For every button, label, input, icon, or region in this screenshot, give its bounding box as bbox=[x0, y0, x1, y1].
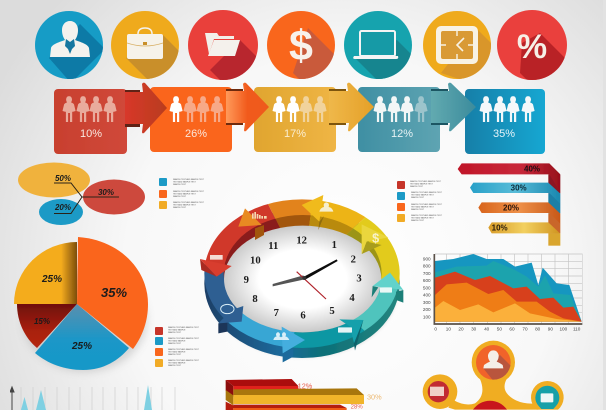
area: blue bbox=[435, 254, 582, 322]
legend: top right: SAMPLE TEXT AND SAMPLE TEXT bbox=[410, 180, 442, 183]
ellipse 20% bbox=[39, 199, 83, 225]
legend: top right: TEXT AND SAMPLE TEXT bbox=[411, 216, 435, 220]
ring top surface bbox=[204, 199, 400, 348]
legend: top left: SAMPLE TEXT AND SAMPLE TEXT bbox=[173, 178, 205, 181]
clock numerals: 9 bbox=[244, 275, 249, 286]
arrow 2 bbox=[226, 83, 269, 131]
slice 35% orange bbox=[77, 237, 148, 349]
icon: businessman bbox=[35, 11, 105, 83]
icon: panel on red arrow bbox=[210, 255, 223, 260]
slice 25% blue bbox=[35, 304, 129, 370]
icon row bbox=[35, 10, 567, 80]
legend: top left: SAMPLE TEXT bbox=[173, 206, 187, 209]
ring outer wall bbox=[204, 209, 400, 358]
icon: bars on orange arrow bbox=[252, 212, 267, 219]
bottom left line chart bbox=[10, 385, 175, 410]
x axis labels: 80 bbox=[535, 327, 541, 332]
slice 25% yellow bbox=[14, 242, 77, 304]
process row bbox=[54, 83, 545, 154]
x axis labels: 90 bbox=[548, 327, 553, 332]
icon: folder bbox=[188, 10, 258, 80]
clock hands bbox=[273, 259, 338, 299]
icon: briefcase bbox=[111, 11, 179, 79]
legend: top right bbox=[397, 180, 443, 222]
box 1: 10% bbox=[54, 89, 127, 154]
legend: top left: SAMPLE TEXT bbox=[173, 195, 187, 198]
icon: briefcase on teal arrow bbox=[380, 287, 392, 293]
clock numerals: 1 bbox=[332, 240, 337, 251]
legend: pie: SAMPLE TEXT AND SAMPLE TEXT bbox=[168, 359, 200, 362]
clock numerals: 5 bbox=[329, 306, 335, 317]
pie shadow bbox=[23, 268, 147, 372]
connectors bbox=[448, 379, 538, 410]
legend: pie: SAMPLE TEXT bbox=[168, 331, 182, 334]
bar 12%: 12% bbox=[298, 382, 313, 391]
legend: top right: SAMPLE TEXT bbox=[411, 219, 425, 222]
clock numerals: 3 bbox=[356, 273, 362, 284]
x axis labels: 100 bbox=[559, 327, 568, 332]
clock with arrow ring bbox=[200, 195, 404, 362]
legend: pie: SAMPLE TEXT bbox=[168, 364, 182, 367]
pie labels bbox=[34, 274, 127, 352]
x axis labels: 30 bbox=[471, 327, 477, 332]
label 20%: 20% bbox=[54, 203, 71, 212]
box 2: 26%: 26% bbox=[185, 128, 207, 140]
clock numerals: 6 bbox=[300, 310, 306, 321]
ellipse 50% bbox=[18, 162, 90, 198]
legend: pie: TEXT AND SAMPLE bbox=[168, 362, 186, 364]
pie labels: 25% bbox=[41, 274, 62, 285]
arrow 3 bbox=[329, 83, 374, 131]
connector lines bbox=[54, 183, 119, 214]
area: orange bbox=[435, 283, 582, 322]
arrow head: dark teal bbox=[339, 319, 363, 351]
axes bbox=[434, 254, 582, 324]
box 3: 17%: 17% bbox=[284, 128, 306, 140]
box 5: 35% bbox=[465, 89, 545, 154]
x axis labels bbox=[434, 327, 581, 332]
ribbon 10%: 10% bbox=[492, 224, 508, 233]
arrow 4 bbox=[431, 83, 476, 131]
y axis labels: 300 bbox=[423, 300, 431, 305]
slice 15% dark red bbox=[17, 304, 77, 348]
clock numerals: 4 bbox=[349, 293, 355, 304]
pie labels: 25% bbox=[71, 341, 92, 352]
center node bbox=[473, 401, 507, 410]
clock numerals: 11 bbox=[268, 241, 278, 252]
legend: pie: SAMPLE TEXT AND SAMPLE TEXT bbox=[168, 348, 200, 351]
y axis labels: 800 bbox=[423, 264, 431, 269]
box 3: 17% bbox=[254, 87, 336, 152]
legend: top right: SAMPLE TEXT AND SAMPLE TEXT bbox=[411, 214, 443, 217]
x axis labels: 110 bbox=[573, 327, 581, 332]
legend: pie: SAMPLE TEXT AND SAMPLE TEXT bbox=[168, 337, 200, 340]
clock numerals: 2 bbox=[351, 254, 356, 265]
y axis labels: 600 bbox=[423, 278, 431, 283]
top node: businessman bbox=[472, 340, 515, 380]
legend: pie: TEXT AND SAMPLE bbox=[168, 350, 186, 354]
box 4: 12% bbox=[358, 87, 440, 152]
pie labels: 15% bbox=[34, 317, 50, 326]
x axis labels: 20 bbox=[458, 327, 464, 332]
legend: top left bbox=[159, 178, 205, 209]
clock face bbox=[224, 226, 381, 332]
area: light orange bbox=[435, 301, 582, 322]
legend: pie: TEXT AND SAMPLE bbox=[168, 328, 186, 332]
legend: top right: TEXT AND SAMPLE TEXT bbox=[411, 206, 435, 208]
network diagram bbox=[423, 341, 564, 410]
legend: top left: TEXT AND SAMPLE TEXT bbox=[173, 192, 197, 196]
legend: pie: TEXT AND SAMPLE bbox=[168, 340, 186, 342]
3D bar chart bbox=[226, 379, 382, 410]
legend: top right: TEXT AND SAMPLE TEXT bbox=[411, 194, 435, 196]
box 2: 26% bbox=[150, 87, 232, 152]
legend: top left: SAMPLE TEXT AND SAMPLE TEXT bbox=[173, 201, 205, 204]
clock numerals: 7 bbox=[274, 308, 280, 319]
legend: top left: SAMPLE TEXT bbox=[173, 183, 187, 186]
legend: top left: TEXT AND SAMPLE TEXT bbox=[173, 180, 197, 184]
axis arrow bbox=[10, 387, 14, 410]
icon: person on gold arrow bbox=[319, 202, 333, 212]
legend: top right: SAMPLE TEXT bbox=[411, 196, 425, 199]
label 50%: 50% bbox=[55, 174, 71, 183]
box 5: 35%: 35% bbox=[493, 128, 515, 140]
y axis labels: 200 bbox=[423, 307, 431, 312]
y axis labels: 400 bbox=[423, 293, 431, 298]
legend: top left: TEXT AND SAMPLE TEXT bbox=[173, 204, 197, 206]
left node: chart bbox=[423, 374, 457, 409]
y axis labels: 100 bbox=[423, 314, 431, 319]
bar 28% bbox=[226, 402, 363, 410]
ellipse percent diagram bbox=[18, 162, 145, 225]
arrow 1 bbox=[125, 83, 167, 133]
area chart bbox=[423, 254, 582, 332]
x axis labels: 60 bbox=[509, 327, 515, 332]
right node: briefcase bbox=[531, 381, 564, 410]
legend: top right: SAMPLE TEXT bbox=[410, 185, 424, 188]
icon: laptop bbox=[344, 11, 412, 79]
light blue peaks bbox=[21, 385, 152, 410]
y axis labels bbox=[423, 256, 431, 319]
ribbon 40%: 40% bbox=[524, 164, 540, 173]
pie labels: 35% bbox=[101, 285, 127, 300]
label 30%: 30% bbox=[98, 188, 114, 197]
legend: top right: SAMPLE TEXT bbox=[411, 208, 425, 211]
icon: square clock bbox=[423, 11, 491, 79]
legend: top right: SAMPLE TEXT AND SAMPLE TEXT bbox=[411, 191, 443, 194]
legend: pie: SAMPLE TEXT bbox=[168, 342, 182, 345]
icon: dollar on yellow arrow: $ bbox=[372, 232, 379, 246]
x axis labels: 50 bbox=[497, 327, 502, 332]
pie chart bbox=[14, 237, 148, 372]
area: teal bbox=[435, 261, 582, 322]
icon: dollar bbox=[267, 11, 335, 79]
icon: laptop on dark teal arrow bbox=[338, 327, 352, 333]
bar 30% bbox=[226, 388, 382, 405]
ellipse 30% bbox=[83, 180, 145, 214]
bar 12% bbox=[226, 379, 313, 397]
ribbon 30%: 30% bbox=[511, 184, 527, 193]
bar 30%: 30% bbox=[367, 392, 382, 401]
box 4: 12%: 12% bbox=[391, 128, 413, 140]
icon: percent bbox=[497, 10, 567, 80]
arrow head: gold bbox=[302, 195, 324, 230]
arrow head: yellow bbox=[362, 224, 388, 254]
legend: pie: SAMPLE TEXT bbox=[168, 353, 182, 356]
box 1: 10%: 10% bbox=[80, 128, 102, 140]
clock numerals: 8 bbox=[252, 294, 258, 305]
arrow head: light teal bbox=[372, 273, 403, 303]
area: red bbox=[435, 272, 582, 322]
legend: top right: TEXT AND SAMPLE TEXT bbox=[410, 182, 434, 186]
ring inner wall bbox=[224, 215, 382, 332]
legend: top left: SAMPLE TEXT AND SAMPLE TEXT bbox=[173, 190, 205, 193]
x axis labels: 0 bbox=[434, 327, 437, 332]
icon: clock on navy arrow bbox=[221, 304, 234, 314]
y axis labels: 500 bbox=[423, 285, 431, 290]
x axis labels: 70 bbox=[522, 327, 528, 332]
legend: top right: SAMPLE TEXT AND SAMPLE TEXT bbox=[411, 203, 443, 206]
clock numerals: 12 bbox=[296, 235, 307, 246]
ribbon 20%: 20% bbox=[503, 203, 519, 212]
x axis labels: 40 bbox=[484, 327, 490, 332]
ring shadow bbox=[208, 222, 398, 358]
y axis labels: 700 bbox=[423, 271, 431, 276]
legend: pie: SAMPLE TEXT AND SAMPLE TEXT bbox=[168, 326, 200, 329]
arrow head: red bbox=[200, 259, 232, 277]
ribbon bar chart bbox=[458, 163, 560, 246]
icon: dollar: $ bbox=[289, 22, 313, 70]
legend: pie bbox=[155, 326, 200, 367]
arrow head: navy bbox=[218, 306, 243, 333]
y axis labels: 900 bbox=[423, 256, 431, 261]
x axis labels: 10 bbox=[446, 327, 451, 332]
clock numerals bbox=[244, 235, 362, 321]
icon: people on blue arrow bbox=[273, 332, 289, 340]
clock numerals: 10 bbox=[250, 255, 261, 266]
arrow head: orange bbox=[238, 208, 264, 240]
icon: percent: % bbox=[517, 28, 547, 66]
ribbon fold column bbox=[548, 174, 560, 246]
arrow head: blue bbox=[282, 327, 305, 362]
